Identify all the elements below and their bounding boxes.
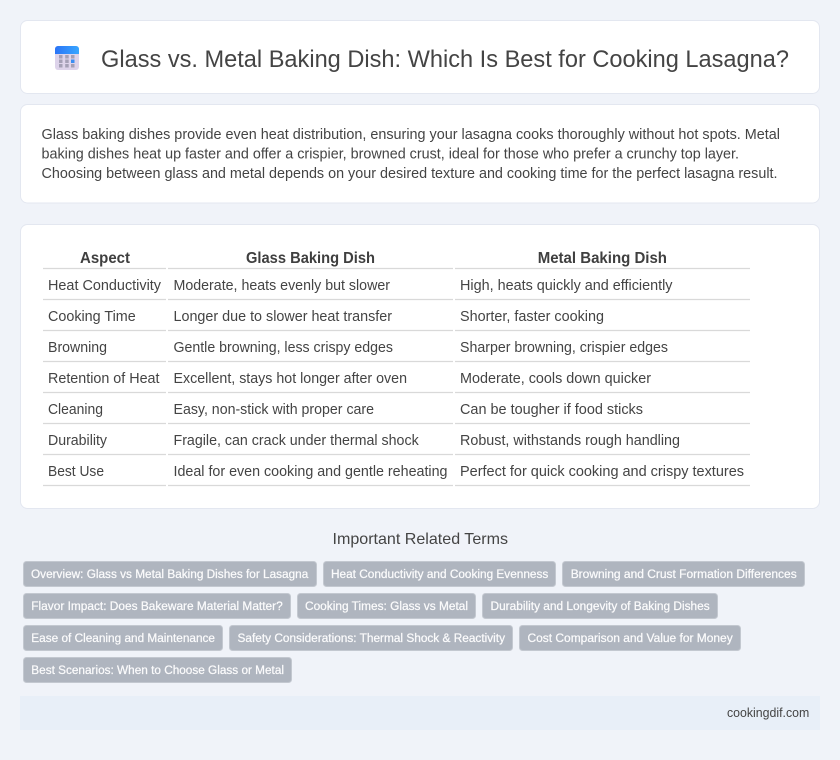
tag: ease of cleaning [24, 626, 222, 650]
table row: browning [43, 340, 750, 362]
tag: best scenarios: Best Scenarios: When to Choose Glass or Metal [31, 663, 284, 677]
icon: calendar [55, 46, 79, 70]
tag: durability [482, 594, 718, 618]
table row: heat conductivity: Heat Conductivity [48, 278, 162, 294]
table row: heat conductivity [43, 278, 750, 300]
table row: heat conductivity: High, heats quickly and efficiently [460, 278, 673, 294]
table row: cooking time [43, 309, 750, 330]
tag: cost comparison: Cost Comparison and Value for Money [528, 631, 733, 645]
table row: durability: Fragile, can crack under thermal shock [174, 433, 419, 449]
panel: title header [20, 20, 820, 94]
text block: description: Glass baking dishes provide even heat distribution, ensuring your lasagna cooks thoroughly without hot spots. Metal [42, 127, 780, 143]
footer [20, 696, 820, 730]
table row: browning: Browning [48, 340, 107, 356]
table row: retention of heat: Excellent, stays hot longer after oven [174, 371, 407, 387]
related term tags [24, 562, 804, 682]
table row: best use [43, 464, 750, 486]
tag: cooking times [298, 594, 476, 618]
table row: durability: Robust, withstands rough handling [460, 433, 680, 449]
table row: browning: Sharper browning, crispier edges [460, 340, 668, 356]
tag: best scenarios [24, 658, 292, 682]
text block: description: baking dishes heat up faster and offer a crispier, browned crust, ideal for those who prefer a crunchy top layer. [42, 146, 739, 162]
table row: retention of heat: Moderate, cools down quicker [460, 371, 651, 387]
table header row [43, 250, 750, 268]
table header row: Aspect [80, 250, 131, 267]
table row: cleaning: Can be tougher if food sticks [460, 402, 643, 418]
panel: comparison table [20, 224, 820, 508]
tag: flavor impact [24, 594, 290, 618]
table row: best use: Ideal for even cooking and gentle reheating [174, 464, 448, 480]
panel: description [20, 104, 820, 203]
table row: browning: Gentle browning, less crispy edges [174, 340, 393, 356]
table row: heat conductivity: Moderate, heats evenly but slower [174, 278, 390, 294]
tag: overview [24, 562, 316, 586]
table row: best use: Best Use [48, 464, 104, 480]
title: Glass vs. Metal Baking Dish: Which Is Best for Cooking Lasagna? [101, 46, 789, 73]
table row: cooking time: Longer due to slower heat transfer [174, 309, 392, 325]
tag: cost comparison [520, 626, 740, 650]
table row: durability [43, 433, 750, 454]
tag: cooking times: Cooking Times: Glass vs Metal [305, 599, 468, 613]
tag: safety [230, 626, 512, 650]
table header row: Metal Baking Dish [538, 250, 667, 267]
tag: durability: Durability and Longevity of Baking Dishes [490, 599, 710, 613]
table row: retention of heat [43, 371, 750, 392]
tag: heat conductivity: Heat Conductivity and Cooking Evenness [331, 567, 548, 581]
table row: cleaning: Cleaning [48, 402, 103, 418]
tag: ease of cleaning: Ease of Cleaning and Maintenance [31, 631, 215, 645]
table row: cleaning [43, 402, 750, 424]
text block: description: Choosing between glass and metal depends on your desired texture and cooking time for the perfect lasagna result. [42, 166, 778, 182]
heading: important related terms: Important Related Terms [332, 531, 508, 548]
tag: browning [562, 562, 804, 586]
tag: heat conductivity [324, 562, 556, 586]
table row: best use: Perfect for quick cooking and crispy textures [460, 464, 744, 480]
table row: cleaning: Easy, non-stick with proper care [174, 402, 374, 418]
table header row: Glass Baking Dish [246, 250, 375, 267]
table row: retention of heat: Retention of Heat [48, 371, 160, 387]
tag: safety: Safety Considerations: Thermal Shock & Reactivity [238, 631, 506, 645]
table row: cooking time: Shorter, faster cooking [460, 309, 604, 325]
text block: description [42, 127, 780, 182]
tag: flavor impact: Flavor Impact: Does Bakeware Material Matter? [31, 599, 283, 613]
table row: durability: Durability [48, 433, 108, 449]
table row: cooking time: Cooking Time [48, 309, 136, 325]
footer source text: cookingdif.com [727, 705, 809, 720]
tag: overview: Overview: Glass vs Metal Baking Dishes for Lasagna [31, 567, 308, 581]
tag: browning: Browning and Crust Formation Differences [571, 567, 797, 581]
